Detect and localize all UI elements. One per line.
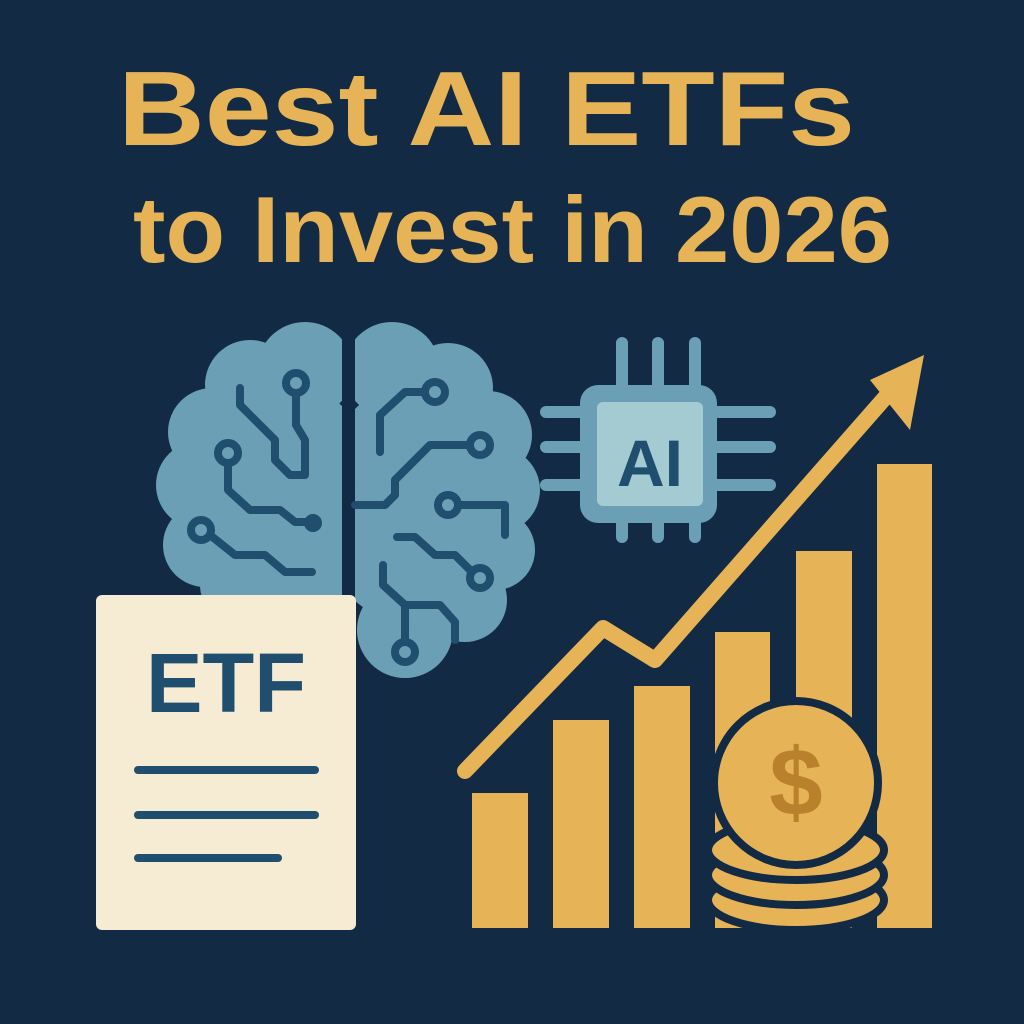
panel: ETF document: ETF — [146, 636, 306, 730]
title: Best AI ETFs — [118, 50, 855, 168]
panel: ETF document — [96, 595, 356, 930]
icon: coin stack: $ — [769, 729, 823, 836]
icon: brain — [156, 322, 540, 678]
icon: AI chip — [546, 343, 770, 537]
bar chart — [472, 464, 932, 928]
icon: AI chip: AI — [617, 426, 683, 500]
arrow: growth trend — [465, 355, 924, 771]
icon: coin stack — [708, 701, 884, 930]
title — [118, 50, 892, 282]
title: to Invest in 2026 — [133, 177, 892, 282]
